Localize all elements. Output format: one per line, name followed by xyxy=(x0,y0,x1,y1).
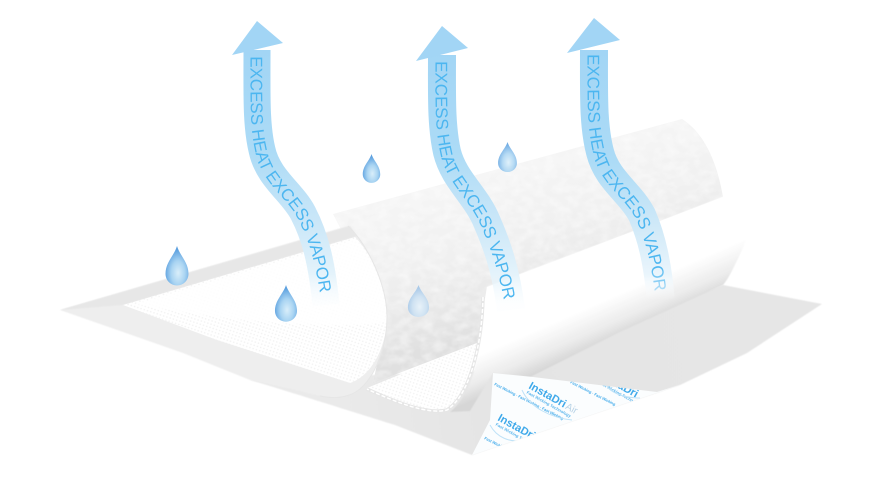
white front roll xyxy=(450,188,751,412)
icon: water drop at roll top xyxy=(498,142,517,172)
icon: water drop on pad edge xyxy=(166,246,188,286)
logo: main InstaDri Air: Air xyxy=(563,401,580,417)
arrow: right vapor arrow xyxy=(567,18,672,291)
logo: main InstaDri Air: Fast Wicking Technology xyxy=(526,390,573,419)
logo: right InstaDri: Fast Wicking Technology xyxy=(598,380,645,409)
top border band xyxy=(60,226,357,310)
arrow: left vapor arrow xyxy=(232,21,338,294)
left pad border xyxy=(60,226,387,397)
left pad white absorbent panel xyxy=(123,237,387,383)
repeating strap lines: Fast Wicking · Fast Wicking · Fast Wicking xyxy=(494,382,564,421)
curl edge line xyxy=(320,226,387,398)
logo: right InstaDri: InstaDri xyxy=(599,370,640,400)
icon: water drop in air xyxy=(363,154,380,183)
icon: water drop on white panel xyxy=(275,285,297,322)
logo: lower InstaDri: InstaDri xyxy=(496,412,537,442)
repeating strap lines xyxy=(484,382,616,446)
icon: pale water drop on textured roll xyxy=(408,285,429,317)
infographic: underpad with vapor arrows xyxy=(61,18,822,455)
textured back of rolled sheet xyxy=(333,119,723,383)
swoosh lines xyxy=(490,385,640,441)
repeating strap lines: Fast Wicking · Fast Wicking xyxy=(484,436,531,463)
logo: lower InstaDri: Fast Wicking Technology xyxy=(495,422,542,451)
arrow: middle vapor arrow xyxy=(416,26,522,300)
arrow label: EXCESS HEAT EXCESS VAPOR xyxy=(250,58,331,292)
upper clean area of white panel xyxy=(135,239,386,325)
peeled corner with printed logo xyxy=(472,373,670,454)
arrow label: EXCESS HEAT EXCESS VAPOR xyxy=(435,62,514,300)
arrow label: EXCESS HEAT EXCESS VAPOR xyxy=(587,56,666,291)
logo: right InstaDri xyxy=(602,385,639,402)
repeating strap lines: Fast Wicking · Fast Wicking xyxy=(570,380,617,407)
logo: main InstaDri Air: InstaDri xyxy=(527,380,568,410)
logo: main InstaDri Air xyxy=(526,382,578,418)
white mesh inner sheet with stitched edge xyxy=(367,297,483,412)
backing sheet xyxy=(250,285,822,455)
